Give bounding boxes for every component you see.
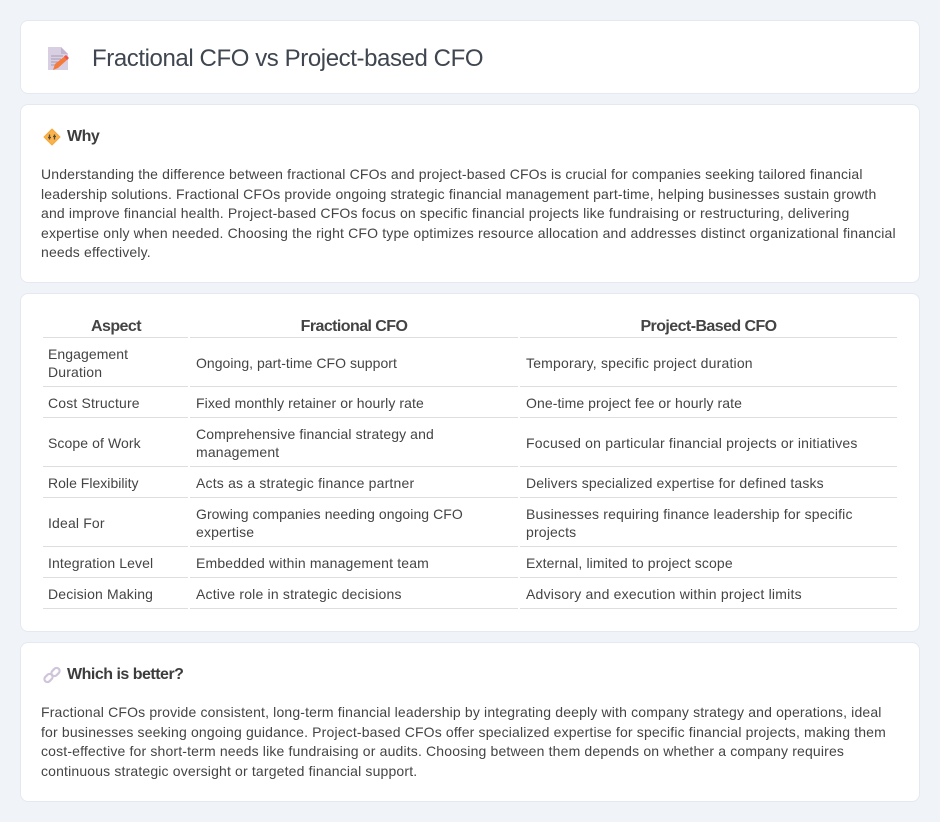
text: Duration bbox=[48, 364, 102, 380]
panel: which is better bbox=[20, 642, 920, 802]
text: Fractional CFOs provide consistent, long-term financial leadership by integrating deeply with company strategy and operations, ideal bbox=[41, 704, 882, 720]
icon: warning diamond bbox=[44, 128, 60, 146]
text: Decision Making bbox=[48, 586, 153, 602]
text: continuous strategic oversight or targeted financial support. bbox=[41, 763, 417, 779]
panel: comparison table bbox=[20, 293, 920, 632]
text: for businesses seeking ongoing guidance. Project-based CFOs offer specialized expertise for specific financial projects, making them bbox=[41, 724, 886, 740]
text: needs effectively. bbox=[41, 244, 151, 260]
text: Advisory and execution within project limits bbox=[526, 586, 802, 602]
text block: why bbox=[41, 166, 896, 260]
text: Acts as a strategic finance partner bbox=[196, 475, 414, 491]
text: cost-effective for short-term needs like fundraising or audits. Choosing between them depends on whether a company requires bbox=[41, 743, 844, 759]
title: Fractional CFO vs Project-based CFO bbox=[92, 45, 483, 72]
heading: which is better: Which is better? bbox=[67, 666, 183, 683]
table rows bbox=[48, 346, 858, 602]
text: expertise only when needed. Choosing the right CFO type optimizes resource allocation and addresses distinct organizational financial bbox=[41, 225, 896, 241]
text: Embedded within management team bbox=[196, 555, 429, 571]
text: Fractional CFO bbox=[301, 318, 407, 335]
panel: header bbox=[20, 20, 920, 94]
text: Growing companies needing ongoing CFO bbox=[196, 506, 463, 522]
text: Ideal For bbox=[48, 515, 105, 531]
text: Focused on particular financial projects or initiatives bbox=[526, 435, 858, 451]
text: One-time project fee or hourly rate bbox=[526, 395, 742, 411]
panel: why bbox=[20, 104, 920, 283]
text block: which is better bbox=[41, 704, 886, 779]
text: Aspect bbox=[91, 318, 141, 335]
text: Project-Based CFO bbox=[640, 318, 777, 335]
table headers bbox=[91, 318, 777, 335]
text: Temporary, specific project duration bbox=[526, 355, 753, 371]
text: Engagement bbox=[48, 346, 128, 362]
icon: chain link bbox=[43, 666, 61, 684]
text: Understanding the difference between fractional CFOs and project-based CFOs is crucial for companies seeking tailored financial bbox=[41, 166, 863, 182]
icon: document with pencil bbox=[48, 47, 69, 70]
heading: why: Why bbox=[67, 128, 99, 145]
text: and improve financial health. Project-based CFOs focus on specific financial projects like fundraising or restructuring, delivering bbox=[41, 205, 849, 221]
text: expertise bbox=[196, 524, 254, 540]
text: projects bbox=[526, 524, 576, 540]
text: Comprehensive financial strategy and bbox=[196, 426, 434, 442]
text: External, limited to project scope bbox=[526, 555, 733, 571]
text: management bbox=[196, 444, 279, 460]
text: Ongoing, part-time CFO support bbox=[196, 355, 397, 371]
text: Scope of Work bbox=[48, 435, 141, 451]
text: leadership solutions. Fractional CFOs provide ongoing strategic financial management part-time, helping businesses sustain growth bbox=[41, 186, 876, 202]
text: Active role in strategic decisions bbox=[196, 586, 402, 602]
text: Integration Level bbox=[48, 555, 153, 571]
text: Role Flexibility bbox=[48, 475, 139, 491]
text: Delivers specialized expertise for defined tasks bbox=[526, 475, 824, 491]
text: Businesses requiring finance leadership for specific bbox=[526, 506, 853, 522]
text: Fixed monthly retainer or hourly rate bbox=[196, 395, 424, 411]
text: Cost Structure bbox=[48, 395, 140, 411]
